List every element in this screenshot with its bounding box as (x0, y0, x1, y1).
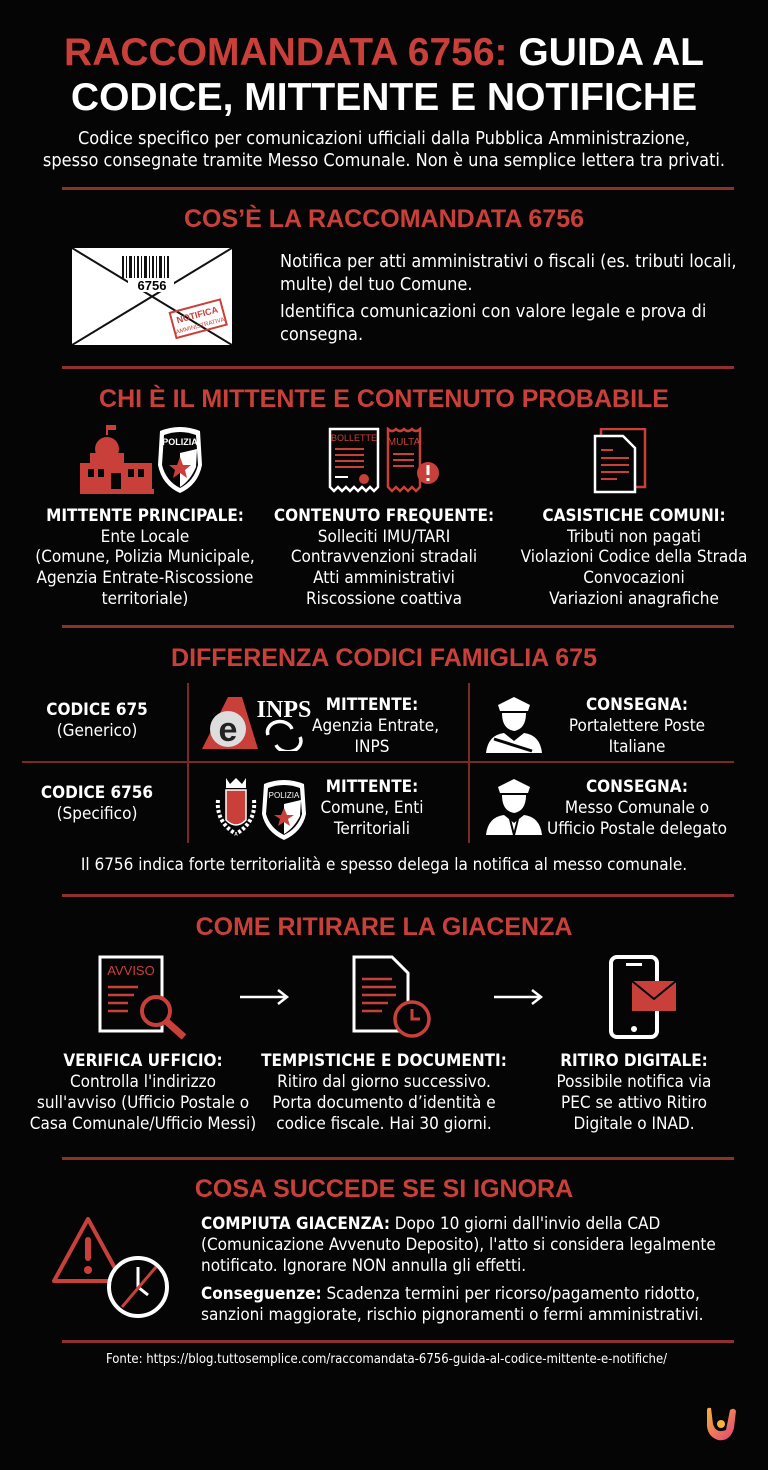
text: mittente principale: Ente Locale (101, 527, 189, 547)
text: ritiro digitale (557, 1051, 711, 1134)
table: codici (22, 683, 734, 843)
icons: stemma e polizia (216, 778, 306, 840)
row 675 label (46, 700, 148, 741)
text: cos'è (280, 251, 737, 345)
text: tempistiche (261, 1051, 507, 1134)
text: verifica ufficio (30, 1051, 256, 1134)
text: conseguenze: sanzioni maggiorate, rischio pignoramenti o fermi amministrativi. (201, 1305, 703, 1325)
text: conseguenze (201, 1284, 703, 1325)
note: Il 6756 indica forte territorialità e spesso delega la notifica al messo comunale. (81, 855, 687, 875)
heading: cos'è: COS’È LA RACCOMANDATA 6756 (184, 205, 584, 233)
text: ritiro digitale: Possibile notifica via (557, 1072, 711, 1092)
text: verifica ufficio: sull'avviso (Ufficio Postale o (37, 1093, 249, 1113)
text: mittente 6756: MITTENTE: (326, 777, 418, 797)
subtitle: spesso consegnate tramite Messo Comunale. Non è una semplice lettera tra privati. (43, 150, 725, 171)
text: verifica ufficio: VERIFICA UFFICIO: (63, 1051, 223, 1071)
text: mittente principale (35, 506, 255, 609)
icons: bollette e multa (328, 427, 439, 493)
text: casistiche comuni: CASISTICHE COMUNI: (542, 506, 726, 526)
row 675 label: (Generico) (57, 721, 137, 741)
text: conseguenze: Conseguenze: Scadenza termini per ricorso/pagamento ridotto, (201, 1284, 700, 1304)
icons: stemma e polizia: POLIZIA (269, 791, 300, 800)
text: contenuto frequente: Atti amministrativi (313, 568, 455, 588)
text: mittente 675: INPS (355, 737, 389, 757)
icon: envelope (72, 248, 232, 345)
text: cos'è: Identifica comunicazioni con valore legale e prova di (280, 301, 706, 322)
text: mittente principale: (Comune, Polizia Municipale, (35, 547, 255, 567)
row 6756 label: CODICE 6756 (41, 783, 153, 803)
icon: smartphone pec (609, 955, 676, 1039)
icon: envelope: AMMINISTRATIVA (175, 317, 225, 336)
subtitle: Codice specifico per comunicazioni ufficiali dalla Pubblica Amministrazione, (78, 128, 690, 149)
heading: differenza: DIFFERENZA CODICI FAMIGLIA 675 (171, 644, 597, 672)
text: mittente 6756: Comune, Enti (320, 798, 424, 818)
icon: messo (486, 779, 542, 835)
text: consegna 6756 (547, 777, 727, 839)
text: consegna 675 (569, 695, 705, 757)
text: contenuto frequente: CONTENUTO FREQUENTE: (274, 506, 494, 526)
text: cos'è: consegna. (280, 324, 363, 345)
text: tempistiche: TEMPISTICHE E DOCUMENTI: (261, 1051, 507, 1071)
text: mittente 675: Agenzia Entrate, (312, 716, 439, 736)
icon: envelope: 6756 (138, 278, 166, 293)
text: consegna 6756: Messo Comunale o (565, 798, 709, 818)
row 675 label: CODICE 675 (46, 700, 148, 720)
icon: documento orologio (352, 956, 431, 1038)
text: compiuta giacenza (201, 1214, 716, 1276)
icons: bollette e multa: BOLLETTE (331, 433, 377, 443)
icons: agenzia entrate inps (202, 697, 311, 751)
title: CODICE, MITTENTE E NOTIFICHE (71, 76, 697, 119)
row 6756 label (41, 783, 153, 824)
icon: postino (486, 697, 542, 753)
heading: ritirare: COME RITIRARE LA GIACENZA (196, 913, 572, 941)
text: compiuta giacenza: (Comunicazione Avvenuto Deposito), l'atto si considera legalmente (201, 1235, 716, 1255)
text: mittente principale: Agenzia Entrate-Riscossione (36, 568, 253, 588)
icons: municipio e polizia: POLIZIA (162, 437, 198, 447)
logo (706, 1408, 736, 1440)
subtitle (43, 128, 725, 171)
icons: bollette e multa: MULTA (388, 437, 421, 448)
text: compiuta giacenza: notificato. Ignorare NON annulla gli effetti. (201, 1256, 526, 1276)
text: mittente 675: MITTENTE: (326, 695, 418, 715)
icons: agenzia entrate inps: INPS (257, 697, 311, 723)
text: contenuto frequente: Riscossione coattiva (306, 589, 462, 609)
text: mittente principale: territoriale) (102, 589, 188, 609)
text: mittente principale: MITTENTE PRINCIPALE: (46, 506, 244, 526)
text: ritiro digitale: RITIRO DIGITALE: (560, 1051, 708, 1071)
text: verifica ufficio: Controlla l'indirizzo (70, 1072, 216, 1092)
icon: documenti (594, 428, 646, 494)
title: RACCOMANDATA 6756: GUIDA AL (64, 31, 704, 74)
text: mittente 6756: Territoriali (334, 819, 410, 839)
text: contenuto frequente (274, 506, 494, 609)
heading: mittente: CHI È IL MITTENTE E CONTENUTO PROBABILE (99, 385, 669, 413)
text: consegna 675: CONSEGNA: (586, 695, 688, 715)
text: casistiche comuni: Tributi non pagati (567, 527, 701, 547)
icon: avviso lente (98, 956, 186, 1040)
text: mittente 675 (312, 695, 439, 757)
icon: envelope: NOTIFICA (175, 304, 219, 325)
text: contenuto frequente: Contravvenzioni stradali (291, 547, 477, 567)
text: casistiche comuni: Variazioni anagrafiche (549, 589, 719, 609)
heading: ignora: COSA SUCCEDE SE SI IGNORA (195, 1175, 573, 1203)
title (64, 31, 704, 119)
text: consegna 675: Italiane (609, 737, 665, 757)
source: Fonte: https://blog.tuttosemplice.com/raccomandata-6756-guida-al-codice-mittente-e-notifiche/ (106, 1352, 667, 1367)
icon: avviso orologio (52, 1216, 169, 1318)
arrow (240, 989, 289, 1005)
row 6756 label: (Specifico) (57, 804, 137, 824)
icons: agenzia entrate inps: e (219, 711, 237, 749)
text: ritiro digitale: PEC se attivo Ritiro (561, 1093, 707, 1113)
text: verifica ufficio: Casa Comunale/Ufficio Messi) (30, 1114, 256, 1134)
text: consegna 6756: Ufficio Postale delegato (547, 819, 727, 839)
text: mittente 6756 (320, 777, 424, 839)
text: contenuto frequente: Solleciti IMU/TARI (318, 527, 450, 547)
text: casistiche comuni (520, 506, 747, 609)
text: tempistiche: codice fiscale. Hai 30 giorni. (276, 1114, 492, 1134)
text: casistiche comuni: Violazioni Codice della Strada (521, 547, 747, 567)
icons: municipio e polizia (80, 425, 202, 494)
text: tempistiche: Porta documento d’identità e (272, 1093, 496, 1113)
text: compiuta giacenza: COMPIUTA GIACENZA: Dopo 10 giorni dall'invio della CAD (201, 1214, 660, 1234)
text: cos'è: multe) del tuo Comune. (280, 274, 472, 295)
icon: avviso lente: AVVISO (107, 963, 155, 978)
text: casistiche comuni: Convocazioni (583, 568, 685, 588)
text: consegna 6756: CONSEGNA: (586, 777, 688, 797)
text: ritiro digitale: Digitale o INAD. (573, 1114, 695, 1134)
text: consegna 675: Portalettere Poste (569, 716, 705, 736)
text: tempistiche: Ritiro dal giorno successivo. (277, 1072, 491, 1092)
arrow (494, 989, 543, 1005)
text: cos'è: Notifica per atti amministrativi o fiscali (es. tributi locali, (280, 251, 737, 272)
